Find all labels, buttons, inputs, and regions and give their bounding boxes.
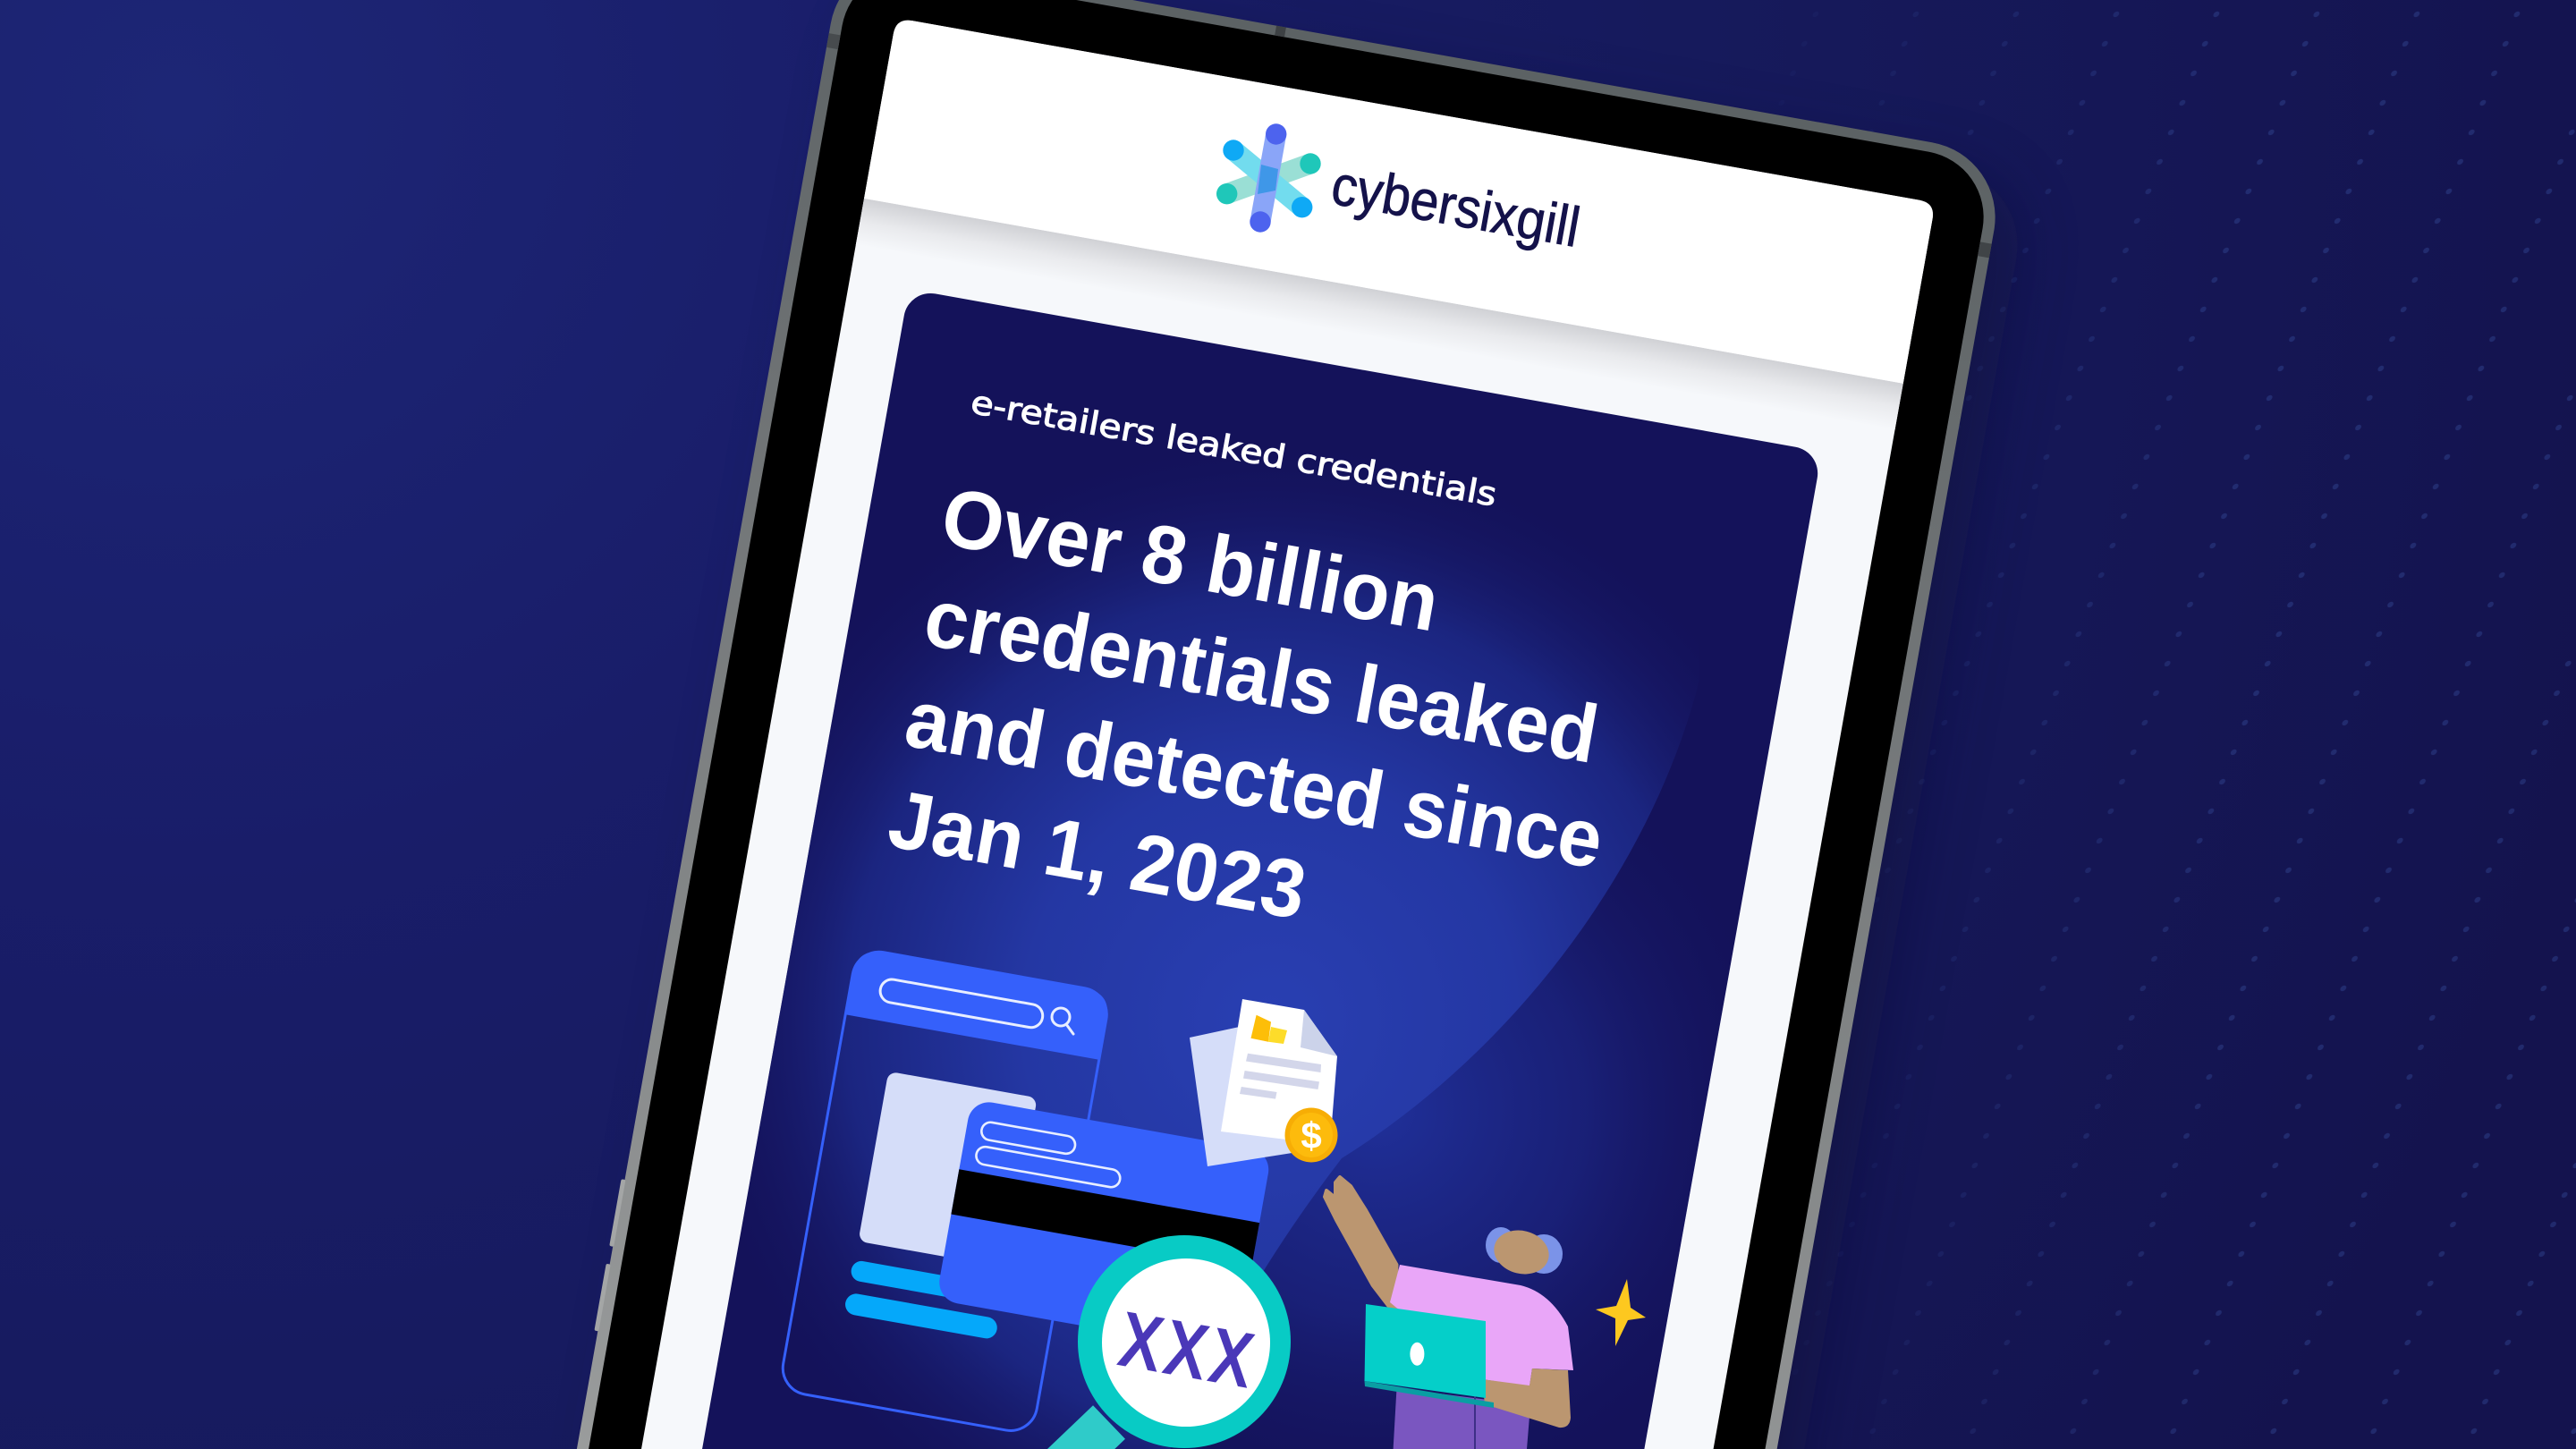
raised arm [1325, 1177, 1397, 1315]
title line 3: and detected since [899, 673, 1610, 886]
browser window and credit card [779, 947, 1294, 1449]
header shadow band [856, 199, 1903, 430]
lens [1052, 1008, 1070, 1026]
card stripe [951, 1169, 1259, 1267]
page panel [858, 1072, 1038, 1267]
side button lower [594, 1264, 611, 1331]
coin outer [1284, 1107, 1338, 1163]
lighter swoosh area [742, 505, 1687, 1449]
cyan bar 2 [843, 1292, 999, 1340]
metal rim [530, 0, 2007, 1449]
rim notch right [1978, 242, 1992, 258]
white header [864, 18, 1936, 384]
back sheet [1190, 1025, 1315, 1166]
background dot pattern [1869, 11, 2576, 1434]
folded corner [1301, 1010, 1337, 1056]
logo mark [1216, 123, 1321, 233]
laptop [1365, 1304, 1486, 1398]
eyebrow: e-retailers leaked credentials [968, 385, 1499, 514]
illustration [779, 947, 1646, 1449]
hair right [1525, 1234, 1563, 1274]
magnifier handle [1048, 1422, 1109, 1449]
cyan bar 1 [850, 1259, 968, 1301]
sparkle star [1596, 1279, 1646, 1346]
magnifying glass [1048, 1235, 1291, 1449]
wordmark: cybersixgill [1327, 154, 1584, 259]
soft glow beyond swoosh [1264, 899, 1730, 1417]
cyan bar [1233, 150, 1302, 208]
browser header [845, 947, 1112, 1060]
text block [881, 383, 1661, 987]
text line 2 [1243, 1071, 1319, 1089]
chart bar short [1268, 1027, 1287, 1044]
rim notch top [1275, 26, 1286, 37]
magnifier lens [1102, 1258, 1270, 1427]
magnifier ring [1078, 1235, 1291, 1448]
browser outline [779, 947, 1111, 1435]
text line 3 [1240, 1087, 1277, 1099]
teal dots [1216, 153, 1321, 204]
title line 1: Over 8 billion [935, 471, 1445, 649]
device shadow [563, 0, 2029, 1449]
chart bar tall [1250, 1015, 1271, 1042]
title line 4: Jan 1, 2023 [882, 773, 1313, 936]
tablet device [516, 0, 2029, 1449]
side button upper [609, 1179, 625, 1247]
pants seam [1474, 1391, 1476, 1449]
blue card [674, 289, 1822, 1449]
periwinkle bar [1260, 134, 1276, 222]
credit card [936, 1099, 1272, 1353]
centre overlap [1258, 165, 1278, 194]
dollar sign: $ [1301, 1114, 1322, 1157]
person with laptop [1325, 1177, 1573, 1449]
shirt [1390, 1265, 1573, 1386]
hair left [1486, 1227, 1516, 1263]
masked password: XXX [1115, 1297, 1265, 1403]
teal bar [1227, 164, 1310, 194]
card field 1 [980, 1121, 1077, 1155]
forearm [1482, 1368, 1571, 1428]
screen background [582, 18, 1936, 1449]
search field [878, 978, 1045, 1030]
coin inner [1290, 1113, 1333, 1157]
title [881, 471, 1646, 987]
card glow [742, 505, 1730, 1449]
laptop logo [1410, 1343, 1424, 1366]
black bezel [540, 0, 1994, 1449]
rim notch left [826, 33, 841, 49]
card field 2 [975, 1146, 1122, 1189]
device body and screen [516, 0, 2007, 1449]
logo: cybersixgill [1216, 123, 1584, 259]
laptop base [1365, 1381, 1494, 1408]
pants [1394, 1388, 1530, 1449]
document with coin [1190, 999, 1338, 1166]
title line 2: credentials leaked [918, 572, 1605, 781]
cyan dots [1223, 140, 1312, 217]
search icon [1052, 1008, 1073, 1034]
front sheet [1221, 999, 1337, 1145]
head [1489, 1224, 1554, 1280]
blue dots [1250, 123, 1286, 233]
handle [1066, 1024, 1073, 1034]
text line 1 [1246, 1054, 1321, 1072]
coin [1284, 1107, 1338, 1163]
